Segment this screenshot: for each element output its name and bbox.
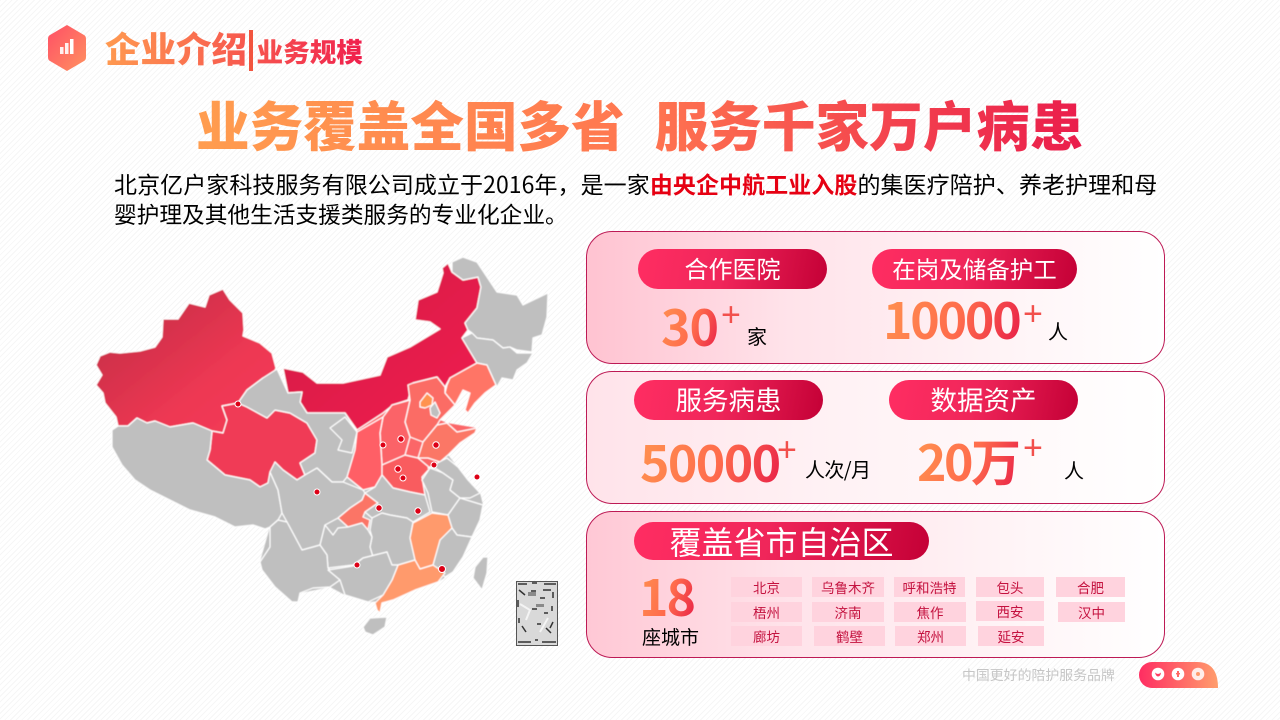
pill: nurses: 在岗及储备护工 <box>892 251 1057 285</box>
region: Heilongjiang <box>452 257 548 352</box>
intro text <box>114 166 1157 230</box>
region: Ningxia <box>330 417 357 453</box>
icon: hexagon with bar chart <box>48 25 86 71</box>
map base: salmon cluster <box>347 377 477 495</box>
region: Gansu <box>238 369 357 482</box>
city tags: 延安 <box>998 626 1024 646</box>
region: Jilin <box>462 333 533 387</box>
city tags: 梧州 <box>753 602 780 622</box>
region: Liaoning <box>445 363 496 413</box>
city tags: 包头 <box>996 577 1024 597</box>
plus sign: + <box>777 431 797 469</box>
city markers <box>235 401 480 572</box>
panel: hospitals and nurses <box>586 231 1165 364</box>
city tags: 焦作 <box>916 602 944 622</box>
unit: 人: 人 <box>1048 316 1068 345</box>
intro text: 北京亿户家科技服务有限公司成立于2016年，是一家由央企中航工业入股的集医疗陪护、养老护理和母 <box>114 166 1157 200</box>
map base: grey silhouette <box>112 369 483 602</box>
stat: 10000: 10000 <box>883 282 1020 354</box>
region: Hunan <box>370 513 415 565</box>
region: Henan <box>382 455 430 495</box>
city tags: 济南 <box>834 602 862 622</box>
region: Hainan <box>363 617 387 635</box>
inset map: South China Sea <box>516 582 558 646</box>
region: Jiangxi <box>410 513 452 569</box>
city tags: 北京 <box>753 577 780 597</box>
city tags: 汉中 <box>1078 602 1105 622</box>
panel: coverage <box>586 511 1165 658</box>
pill: coverage heading <box>634 522 929 560</box>
pill: data assets: 数据资产 <box>930 379 1036 418</box>
unit: per month: 人次/月 <box>805 454 870 483</box>
pill: partner hospitals: 合作医院 <box>684 250 780 285</box>
region: Qinghai <box>207 403 317 487</box>
city tags: 鹤壁 <box>836 626 863 646</box>
region: Guizhou <box>320 523 387 568</box>
unit: 人: 人 <box>1064 455 1084 484</box>
region: Shandong <box>418 423 477 462</box>
stat: 18: 18 <box>639 559 694 631</box>
stat: 50000: 50000 <box>640 425 780 497</box>
region: Hubei <box>365 475 430 522</box>
region: Jiangsu <box>428 458 480 498</box>
region: Hebei <box>405 377 455 442</box>
region: Zhejiang <box>448 498 483 537</box>
pill: data assets <box>889 380 1078 420</box>
region: Taiwan <box>473 557 488 590</box>
footer slogan: 中国更好的陪护服务品牌 <box>962 665 1115 685</box>
city tags: 乌鲁木齐 <box>821 577 875 597</box>
city tags: 郑州 <box>917 626 944 646</box>
city tags: 合肥 <box>1077 577 1104 597</box>
city tags: 廊坊 <box>753 626 780 646</box>
plus sign: + <box>1023 429 1043 467</box>
plus sign: + <box>1023 295 1043 333</box>
region: Tianjin <box>430 402 440 418</box>
city tags: 西安 <box>996 601 1024 621</box>
footer social pill <box>1139 662 1218 688</box>
region: Inner Mongolia <box>283 263 481 430</box>
pill: patients served <box>634 380 823 420</box>
pill: patients served: 服务病患 <box>676 379 782 418</box>
region: Xinjiang <box>96 289 276 433</box>
unit: 家: 家 <box>747 321 767 350</box>
region: Anhui <box>422 468 460 515</box>
region: Tibet <box>112 418 282 529</box>
city tags <box>732 577 1125 646</box>
region: Shanxi <box>380 400 410 465</box>
region: Beijing <box>420 393 433 408</box>
intro text: 婴护理及其他生活支援类服务的专业化企业。 <box>114 196 568 230</box>
region: Sichuan <box>270 462 365 550</box>
region: Chongqing <box>338 493 378 530</box>
panel: patients and data <box>586 371 1165 504</box>
stat: 200k: 20万 <box>917 424 1018 496</box>
pill: coverage heading: 覆盖省市自治区 <box>669 518 894 564</box>
stat: 30: 30 <box>661 289 718 361</box>
region: Guangxi <box>328 552 398 602</box>
china map <box>96 257 558 646</box>
pill: nurses <box>872 249 1077 289</box>
region: Yunnan <box>260 520 340 602</box>
unit: cities: 座城市 <box>642 623 699 650</box>
region: Guangdong <box>375 560 445 613</box>
pill: partner hospitals <box>638 249 827 289</box>
city tags: 呼和浩特 <box>902 577 956 597</box>
region: Shaanxi <box>347 417 383 490</box>
region: Fujian <box>433 528 472 577</box>
plus sign: + <box>721 296 741 334</box>
